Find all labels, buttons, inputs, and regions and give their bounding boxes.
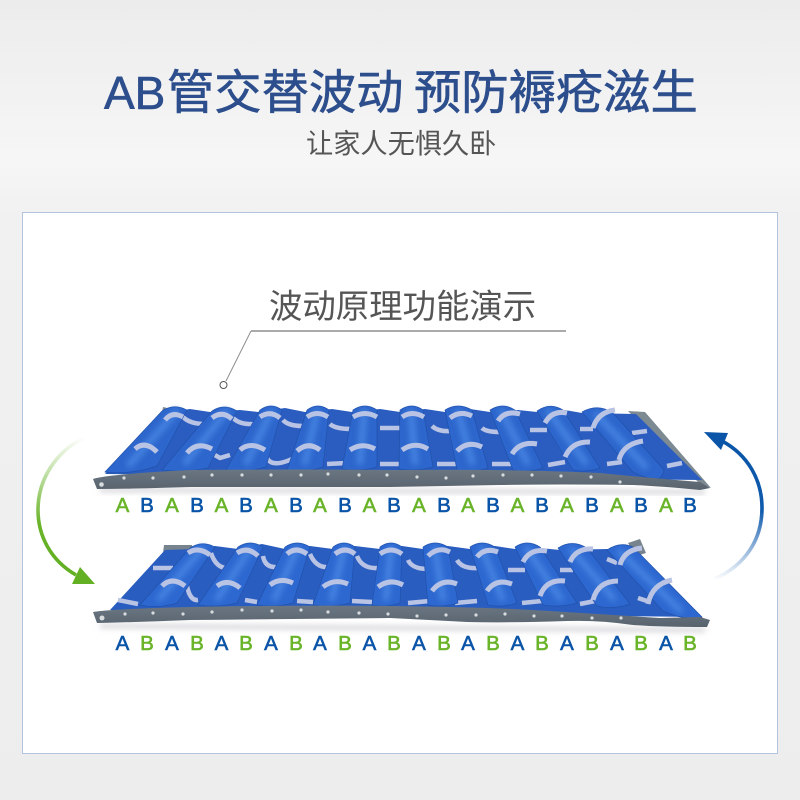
letters: state two AB row: A xyxy=(215,632,229,655)
letters: state two AB row: A xyxy=(511,632,525,655)
letters: state one AB row: A xyxy=(610,494,624,517)
grey base strip xyxy=(93,606,710,627)
letters: state one AB row: A xyxy=(363,494,377,517)
letters: state one AB row: B xyxy=(387,494,401,517)
letters: state one AB row: A xyxy=(412,494,426,517)
letters: state one AB row: B xyxy=(585,494,599,517)
letters: state one AB row: A xyxy=(264,494,278,517)
letters: state two AB row: B xyxy=(338,632,352,655)
grey base strip xyxy=(93,470,710,490)
letters: state one AB row: B xyxy=(190,494,204,517)
letters: state one AB row: A xyxy=(165,494,179,517)
shadow xyxy=(100,490,705,492)
letters: state two AB row: B xyxy=(535,632,549,655)
letters: state two AB row: B xyxy=(683,632,697,655)
title: 预防褥疮滋生 xyxy=(414,67,698,120)
title: AB xyxy=(104,67,165,119)
shadow xyxy=(100,626,705,630)
grey corner tabs xyxy=(163,539,646,556)
letters: state one AB row: B xyxy=(338,494,352,517)
back strap pieces xyxy=(183,417,682,466)
letters: state one AB row: B xyxy=(437,494,451,517)
subtitle: 让家人无惧久卧 xyxy=(306,128,496,159)
letters: state one AB row: B xyxy=(486,494,500,517)
heading: wave principle: 波动原理功能演示 xyxy=(269,289,536,326)
letters: state one AB row: B xyxy=(634,494,648,517)
inflated tubes xyxy=(140,543,702,618)
tube highlights xyxy=(130,412,645,466)
rivets xyxy=(99,472,622,487)
grey edges xyxy=(161,407,711,488)
letters: state two AB row: B xyxy=(634,632,648,655)
letters: state two AB row: B xyxy=(486,632,500,655)
tube bands xyxy=(135,410,643,460)
letters: state one AB row xyxy=(116,494,697,517)
letters: state one AB row: B xyxy=(289,494,303,517)
letters: state two AB row: A xyxy=(610,632,624,655)
letters: state one AB row: A xyxy=(461,494,475,517)
callout leader line xyxy=(220,331,566,388)
panel: demonstration xyxy=(22,212,778,754)
letters: state two AB row: A xyxy=(116,632,130,655)
letters: state two AB row: A xyxy=(461,632,475,655)
letters: state one AB row: A xyxy=(511,494,525,517)
mattress: state two xyxy=(93,539,710,630)
letters: state two AB row xyxy=(116,632,697,655)
tube bands xyxy=(162,548,672,604)
letters: state two AB row: A xyxy=(560,632,574,655)
letters: state two AB row: B xyxy=(437,632,451,655)
letters: state two AB row: A xyxy=(165,632,179,655)
arrow: green down xyxy=(38,437,95,584)
letters: state one AB row: B xyxy=(140,494,154,517)
letters: state one AB row: A xyxy=(659,494,673,517)
letters: state one AB row: B xyxy=(239,494,253,517)
letters: state one AB row: A xyxy=(215,494,229,517)
tube highlights xyxy=(160,549,680,610)
letters: state two AB row: A xyxy=(659,632,673,655)
letters: state one AB row: A xyxy=(313,494,327,517)
letters: state two AB row: B xyxy=(239,632,253,655)
letters: state two AB row: B xyxy=(585,632,599,655)
letters: state one AB row: A xyxy=(116,494,130,517)
letters: state two AB row: B xyxy=(289,632,303,655)
title: 管交替波动 xyxy=(167,67,417,120)
back sheet xyxy=(110,544,700,617)
letters: state two AB row: B xyxy=(387,632,401,655)
inflated tubes xyxy=(105,406,664,479)
rivets xyxy=(100,608,623,620)
back sheet xyxy=(105,408,702,480)
letters: state two AB row: B xyxy=(190,632,204,655)
mattress: state one xyxy=(93,406,711,492)
letters: state two AB row: A xyxy=(313,632,327,655)
back strap pieces xyxy=(118,553,650,604)
letters: state two AB row: A xyxy=(412,632,426,655)
letters: state two AB row: A xyxy=(363,632,377,655)
arrow: blue up xyxy=(704,432,762,579)
letters: state two AB row: B xyxy=(140,632,154,655)
letters: state one AB row: A xyxy=(560,494,574,517)
letters: state one AB row: B xyxy=(535,494,549,517)
letters: state two AB row: A xyxy=(264,632,278,655)
letters: state one AB row: B xyxy=(683,494,697,517)
